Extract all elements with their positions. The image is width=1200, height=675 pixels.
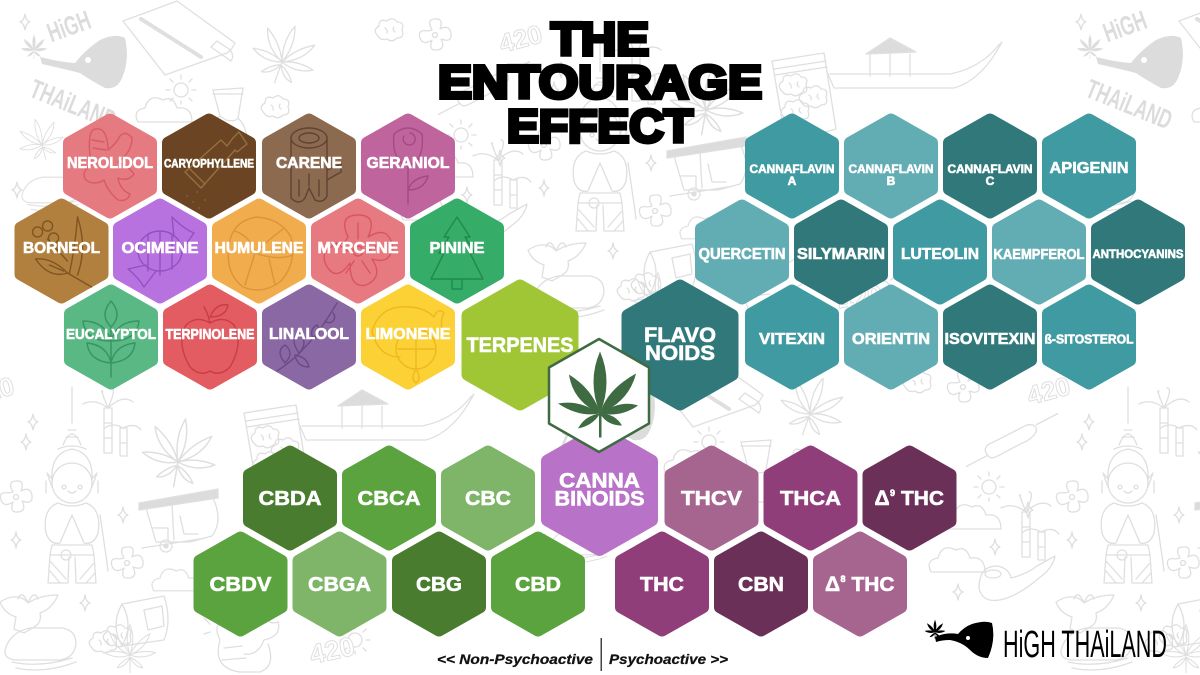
hexagon: CBD	[497, 538, 579, 630]
hexagon: Terpenes category: TERPENES	[466, 334, 574, 357]
hexagon: Ocimene with candy icon	[119, 204, 201, 298]
hexagon: Ocimene with candy icon: OCIMENE	[122, 240, 198, 257]
hexagon: Borneol with herb icon: BORNEOL	[23, 240, 100, 257]
hexagon: Nerolidol with ginger icon: NEROLIDOL	[67, 155, 153, 172]
hexagon: Flavonoids category: NOIDS	[645, 342, 715, 365]
hexagon: Cannaflavin C: CANNAFLAVIN	[948, 162, 1032, 176]
hexagon: Delta-8 THC	[819, 538, 901, 630]
hexagon: Caryophyllene with pepper grinder icon	[164, 120, 254, 212]
hexagon: CBDA	[249, 452, 331, 544]
hexagon: Apigenin	[1048, 120, 1130, 212]
panel: cannabinoids cluster	[200, 432, 950, 630]
hexagon: Cannabinoids category: BINOIDS	[554, 488, 644, 510]
hexagon: Humulene with hops icon	[214, 204, 304, 298]
hexagon: CBD: CBD	[515, 573, 561, 596]
hexagon: Cannaflavin B: CANNAFLAVIN	[848, 162, 934, 176]
hexagon: Delta-8 THC: 8	[840, 574, 846, 584]
hexagon: CBDA: CBDA	[259, 487, 322, 510]
hexagon: CBDV: CBDV	[210, 573, 272, 596]
hexagon: Humulene with hops icon: HUMULENE	[214, 240, 304, 257]
hexagon: Borneol with herb icon	[20, 204, 102, 298]
hexagon: Vitexin: VITEXIN	[759, 331, 825, 348]
hexagon: Cannaflavin A: CANNAFLAVIN	[750, 162, 834, 176]
panel: terpenes cluster	[20, 120, 574, 403]
hexagon: Eucalyptol with leaves icon: EUCALYPTOL	[66, 326, 156, 343]
legend: non-psychoactive and psychoactive: << Non-Psychoactive	[437, 651, 593, 667]
hexagon: Terpinolene with apple icon	[166, 290, 255, 384]
hexagon: Terpenes category	[466, 287, 574, 403]
title	[438, 13, 762, 152]
hexagon: CBCA: CBCA	[358, 487, 421, 510]
title: EFFECT	[507, 100, 693, 152]
hexagon: Orientin: ORIENTIN	[852, 331, 930, 348]
hexagon: CBG: CBG	[416, 573, 462, 596]
hexagon: CBGA	[298, 538, 380, 630]
hexagon: Limonene with lemon icon: LIMONENE	[366, 326, 450, 343]
hexagon: THC	[621, 538, 703, 630]
hexagon: Delta-9 THC: THC	[901, 487, 944, 510]
hexagon: Beta-sitosterol	[1044, 290, 1134, 384]
hexagon: Terpinolene with apple icon: TERPINOLENE	[166, 327, 255, 343]
hexagon: Vitexin	[751, 290, 833, 384]
hexagon: Limonene with lemon icon	[366, 290, 450, 384]
hexagon: Myrcene with flower icon	[317, 204, 399, 298]
panel: flavonoids cluster	[628, 120, 1184, 403]
hexagon: Geraniol with rose icon	[366, 120, 450, 212]
hexagon: CBN	[720, 538, 802, 630]
hexagon: Cannaflavin B: B	[887, 174, 896, 188]
hexagon: THCA: THCA	[780, 487, 841, 510]
hexagon: Flavonoids category: FLAVO	[644, 324, 716, 347]
hexagon: Silymarin: SILYMARIN	[797, 246, 885, 263]
hexagon: Orientin	[850, 290, 932, 384]
hexagon: Isovitexin	[944, 290, 1036, 384]
hexagon: THC: THC	[640, 573, 684, 596]
hexagon: Cannabinoids category	[548, 432, 651, 549]
title: THE	[551, 13, 649, 65]
hexagon: Cannaflavin C	[948, 120, 1032, 212]
title: ENTOURAGE	[438, 56, 762, 108]
hexagon: Pinine with pine tree icon	[416, 204, 498, 298]
hexagon: Eucalyptol with leaves icon	[66, 290, 156, 384]
hexagon: Luteolin: LUTEOLIN	[901, 246, 979, 263]
hexagon: THCV: THCV	[681, 487, 742, 510]
hexagon: Cannaflavin A: A	[788, 174, 797, 188]
legend: non-psychoactive and psychoactive	[437, 638, 728, 671]
hexagon: Delta-8 THC: THC	[852, 573, 895, 596]
hexagon: Geraniol with rose icon: GERANIOL	[366, 155, 450, 172]
hexagon: CBG	[398, 538, 480, 630]
hexagon: Nerolidol with ginger icon	[67, 120, 153, 212]
hexagon: CBN: CBN	[738, 573, 784, 596]
hexagon: Flavonoids category	[628, 287, 732, 403]
hexagon: Myrcene with flower icon: MYRCENE	[318, 240, 398, 257]
hexagon: Anthocyanins	[1092, 206, 1184, 298]
icon: central cannabis leaf hexagon	[549, 339, 649, 452]
hexagon: Apigenin: APIGENIN	[1050, 160, 1128, 177]
hexagon: THCV	[670, 452, 752, 544]
hexagon: Anthocyanins: ANTHOCYANINS	[1092, 247, 1184, 261]
hexagon: Carene with log icon: CARENE	[276, 155, 342, 172]
hexagon: Isovitexin: ISOVITEXIN	[944, 331, 1036, 348]
hexagon: Cannaflavin C: C	[986, 174, 995, 188]
hexagon: Kaempferol	[994, 206, 1084, 298]
hexagon: Cannaflavin A	[750, 120, 834, 212]
hexagon: Delta-9 THC	[868, 452, 950, 544]
hexagon: Delta-9 THC: Δ	[874, 487, 890, 510]
hexagon: Cannabinoids category: CANNA	[559, 470, 640, 492]
logo: High Thailand	[925, 621, 1167, 666]
hexagon: THCA	[770, 452, 852, 544]
legend: non-psychoactive and psychoactive: Psychoactive >>	[609, 651, 728, 667]
hexagon: CBDV	[200, 538, 282, 630]
hexagon: CBGA: CBGA	[308, 573, 371, 596]
hexagon: Cannaflavin B	[848, 120, 934, 212]
hexagon: Linalool with lavender icon: LINALOOL	[269, 326, 349, 343]
hexagon: Kaempferol: KAEMPFEROL	[994, 246, 1084, 263]
hexagon: CBC: CBC	[465, 487, 511, 510]
hexagon: Quercetin	[698, 206, 786, 298]
hexagon: Carene with log icon	[268, 120, 350, 212]
hexagon: Pinine with pine tree icon: PININE	[430, 240, 484, 257]
hexagon: Beta-sitosterol: ß-SITOSTEROL	[1044, 332, 1134, 346]
hexagon: Delta-9 THC: 9	[890, 488, 895, 498]
hexagon: Caryophyllene with pepper grinder icon: CARYOPHYLLENE	[164, 158, 254, 170]
hexagon: Quercetin: QUERCETIN	[698, 246, 786, 263]
hexagon: Luteolin	[899, 206, 981, 298]
hexagon: CBCA	[348, 452, 430, 544]
hexagon: Linalool with lavender icon	[268, 290, 350, 384]
hexagon: Delta-8 THC: Δ	[825, 573, 840, 596]
hexagon: Silymarin	[797, 206, 885, 298]
hexagon: CBC	[447, 452, 529, 544]
